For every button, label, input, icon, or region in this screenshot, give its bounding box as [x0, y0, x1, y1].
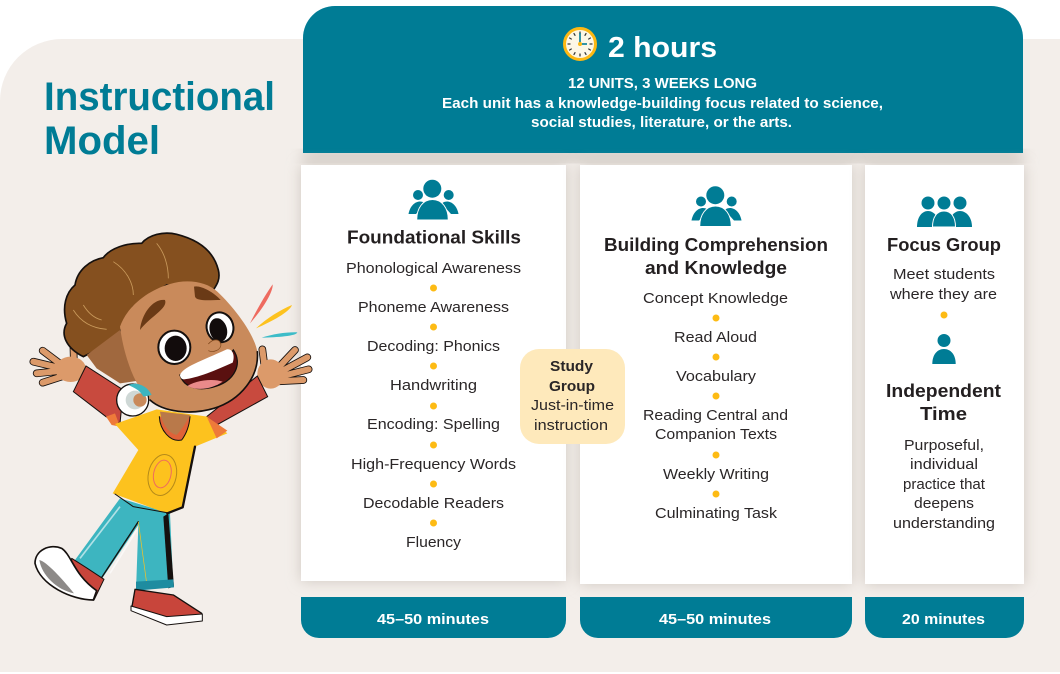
mouth — [180, 349, 237, 389]
header banner — [303, 6, 1023, 162]
callout: study group: instruction — [534, 417, 608, 434]
skills list: Phoneme Awareness — [358, 299, 509, 316]
excitement sparks — [250, 284, 297, 338]
icon: group of three — [692, 186, 742, 226]
skills list: Handwriting — [390, 377, 477, 394]
components list — [643, 290, 788, 522]
heading: independent time: Time — [920, 403, 967, 424]
heading: Foundational Skills — [347, 226, 521, 248]
focus group description — [889, 266, 997, 303]
components list: Concept Knowledge — [643, 290, 788, 307]
heading: focus group: Focus Group — [887, 234, 1001, 255]
time bar: focus group — [865, 597, 1024, 638]
heading — [604, 234, 828, 278]
arms — [73, 366, 268, 425]
independent time description: deepens — [914, 495, 974, 512]
skills list: Phonological Awareness — [346, 260, 521, 277]
head — [120, 281, 257, 412]
header description: Each unit has a knowledge-building focus related to science, — [442, 96, 883, 112]
heading: Building Comprehension — [604, 234, 828, 255]
components list: Read Aloud — [674, 329, 757, 346]
time bar: foundational skills — [301, 597, 566, 638]
eyes — [158, 309, 237, 364]
panel: building comprehension and knowledge — [580, 165, 852, 584]
independent time description: Purposeful, — [904, 437, 984, 454]
skills list — [346, 260, 521, 551]
callout: study group: Group — [549, 378, 595, 395]
right shoe — [131, 589, 202, 625]
time bar: foundational skills: 45–50 minutes — [377, 612, 489, 628]
callout: study group — [520, 349, 625, 444]
heading: independent time — [886, 380, 1001, 424]
eyebrows — [140, 286, 221, 330]
icon: single person — [932, 334, 956, 364]
legs — [75, 498, 174, 591]
title: Model — [44, 119, 160, 163]
time bar: building comprehension: 45–50 minutes — [659, 612, 771, 628]
list dots — [430, 284, 437, 526]
title — [44, 75, 275, 163]
independent time description: understanding — [893, 515, 995, 532]
focus group description: where they are — [889, 286, 997, 303]
left shoe — [35, 547, 104, 600]
dot separator — [940, 312, 948, 318]
components list: Weekly Writing — [663, 466, 769, 483]
header description — [442, 76, 883, 131]
components list: Culminating Task — [655, 505, 778, 522]
skills list: Encoding: Spelling — [367, 416, 500, 433]
skills list: Fluency — [406, 534, 462, 551]
callout: study group: Study — [550, 358, 594, 375]
header description: 12 UNITS, 3 WEEKS LONG — [568, 76, 757, 92]
heading: and Knowledge — [645, 257, 787, 278]
callout: study group: Just-in-time — [531, 397, 614, 414]
icon: clock — [564, 28, 596, 60]
illustration: cheering boy — [33, 233, 309, 625]
right hand — [257, 349, 309, 389]
shirt — [106, 409, 227, 513]
skills list: High-Frequency Words — [351, 456, 516, 473]
hair — [64, 233, 219, 383]
heading: independent time: Independent — [886, 380, 1001, 401]
icon: three people — [917, 196, 972, 227]
ear with hearing aid — [117, 384, 152, 416]
components list: Companion Texts — [655, 426, 777, 443]
time bar: focus group: 20 minutes — [902, 612, 985, 628]
time bar: building comprehension — [580, 597, 852, 638]
independent time description — [893, 437, 995, 532]
focus group description: Meet students — [893, 266, 995, 283]
list dots — [712, 314, 720, 498]
panel: foundational skills — [301, 165, 566, 581]
title: Instructional — [44, 75, 275, 119]
header description: social studies, literature, or the arts. — [531, 115, 792, 131]
independent time description: individual — [910, 456, 978, 473]
components list: Vocabulary — [676, 368, 757, 385]
skills list: Decodable Readers — [363, 495, 504, 512]
components list: Reading Central and — [643, 407, 788, 424]
duration heading: 2 hours — [608, 32, 717, 64]
skills list: Decoding: Phonics — [367, 338, 500, 355]
icon: group of three — [408, 180, 458, 220]
panel: focus group and independent time — [865, 165, 1024, 584]
left hand — [33, 343, 86, 383]
independent time description: practice that — [903, 476, 986, 493]
